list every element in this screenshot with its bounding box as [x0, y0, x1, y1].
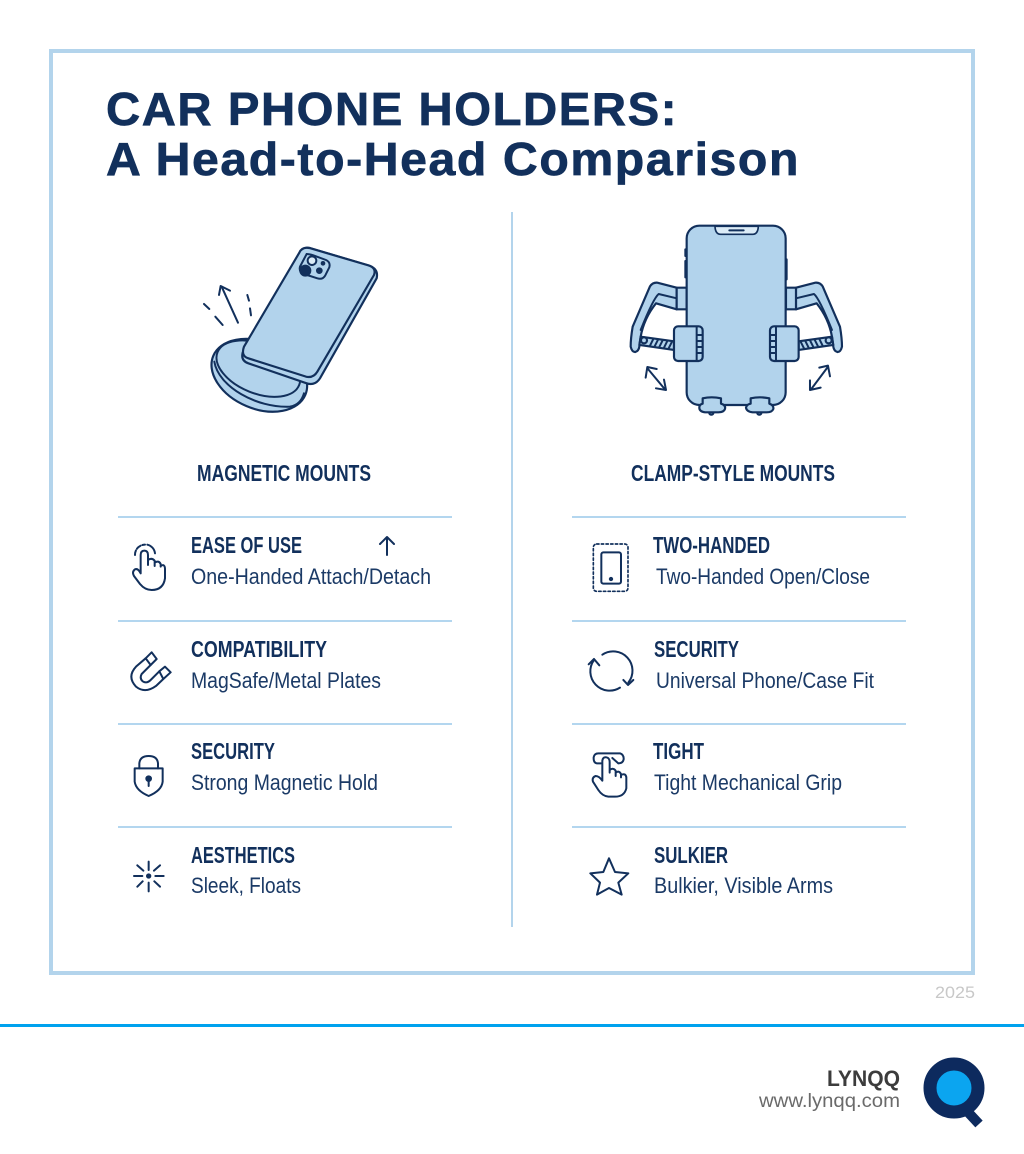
row: bulkier: Bulkier, Visible Arms	[654, 873, 833, 898]
row: tight	[572, 723, 906, 797]
notch	[715, 226, 758, 234]
panel: magnetic mounts	[118, 248, 452, 898]
column heading: CLAMP-STYLE MOUNTS	[631, 460, 835, 486]
icon: sparkle	[134, 862, 164, 891]
right grip pad	[770, 326, 799, 361]
side buttons	[684, 248, 788, 280]
title: A Head-to-Head Comparison	[106, 133, 800, 185]
phone body	[687, 226, 786, 405]
logo	[930, 1064, 979, 1124]
brand text: LYNQQ	[827, 1066, 900, 1091]
brand text	[758, 1066, 900, 1112]
arrow: lift off	[204, 286, 251, 325]
row: aesthetics	[118, 826, 452, 898]
title	[106, 83, 800, 185]
row: aesthetics: Sleek, Floats	[191, 873, 301, 898]
left clamp arm	[631, 283, 687, 352]
row: security: SECURITY	[191, 738, 275, 764]
row: tight: Tight Mechanical Grip	[654, 770, 842, 795]
arrows: adjust	[646, 366, 830, 390]
year: 2025	[935, 983, 975, 1002]
row: security	[572, 620, 906, 693]
column heading: MAGNETIC MOUNTS	[197, 460, 371, 486]
row: bulkier	[572, 826, 906, 898]
title: CAR PHONE HOLDERS:	[106, 83, 678, 135]
icon: padlock shield	[135, 756, 163, 796]
row: security	[118, 723, 452, 796]
row: ease of use: One-Handed Attach/Detach	[191, 564, 431, 589]
row: two-handed: TWO-HANDED	[653, 532, 770, 558]
phone body	[242, 248, 377, 384]
icon: rotate arrows	[589, 651, 633, 691]
row: two-handed: Two-Handed Open/Close	[656, 564, 870, 589]
panel: clamp-style mounts	[572, 226, 906, 898]
icon: pinch hand	[593, 753, 626, 797]
camera module	[299, 254, 330, 279]
row: security: SECURITY	[654, 636, 739, 662]
right clamp arm	[786, 283, 842, 352]
row: bulkier: SULKIER	[654, 842, 728, 868]
illustration: phone on magnetic mount	[200, 248, 377, 426]
row: compatibility	[118, 620, 452, 693]
base disc	[200, 325, 318, 426]
row: compatibility: MagSafe/Metal Plates	[191, 668, 381, 693]
row: compatibility: COMPATIBILITY	[191, 636, 327, 662]
row: security: Universal Phone/Case Fit	[656, 668, 874, 693]
panel: comparison frame	[51, 51, 973, 973]
icon: phone in dashed frame	[593, 544, 628, 591]
footer rule	[0, 1024, 1024, 1027]
icon: horseshoe magnet	[131, 652, 171, 690]
row: two-handed	[572, 516, 906, 591]
row: aesthetics: AESTHETICS	[191, 842, 295, 868]
row: ease of use: EASE OF USE	[191, 532, 302, 558]
left grip pad	[674, 326, 703, 361]
brand text: www.lynqq.com	[758, 1091, 900, 1112]
arrow: up	[380, 537, 394, 555]
icon: star	[590, 858, 628, 895]
row: tight: TIGHT	[653, 738, 704, 764]
illustration: phone in clamp mount	[631, 226, 842, 415]
bottom feet	[699, 397, 773, 415]
row: ease of use	[118, 516, 452, 590]
row: security: Strong Magnetic Hold	[191, 770, 378, 795]
icon: tap hand	[133, 545, 165, 590]
